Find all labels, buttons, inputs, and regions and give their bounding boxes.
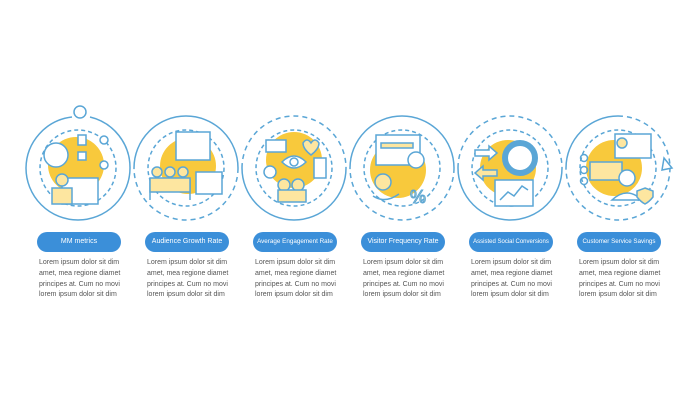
text 4: Lorem ipsum dolor sit dim amet, mea regione diamet principes at. Cum no movi lorem ipsum dolor sit dim xyxy=(363,259,444,298)
step 5 circle xyxy=(458,116,562,220)
pill: Average Engagement Rate xyxy=(253,232,337,252)
pill: Visitor Frequency Rate xyxy=(361,232,445,252)
pill: Assisted Social Conversions xyxy=(469,232,553,252)
pill: Assisted Social Conversions: Assisted Social Conversions xyxy=(473,239,549,245)
text 1: Lorem ipsum dolor sit dim amet, mea regione diamet principes at. Cum no movi lorem ipsum dolor sit dim xyxy=(39,259,120,298)
step 3 circle xyxy=(242,116,346,220)
pill: Audience Growth Rate xyxy=(145,232,229,252)
step 2 circle xyxy=(134,116,238,220)
text 5: Lorem ipsum dolor sit dim amet, mea regione diamet principes at. Cum no movi lorem ipsum dolor sit dim xyxy=(471,259,552,298)
text 2: Lorem ipsum dolor sit dim amet, mea regione diamet principes at. Cum no movi lorem ipsum dolor sit dim xyxy=(147,259,228,298)
step 4 circle: % xyxy=(410,187,426,207)
pill: MM metrics xyxy=(37,232,121,252)
text 3: Lorem ipsum dolor sit dim amet, mea regione diamet principes at. Cum no movi lorem ipsum dolor sit dim xyxy=(255,259,336,298)
pill: MM metrics: MM metrics xyxy=(61,238,97,245)
pill: Customer Service Savings xyxy=(577,232,661,252)
pill: Average Engagement Rate: Average Engagement Rate xyxy=(257,238,333,245)
step 4 circle xyxy=(350,116,454,220)
pill: Audience Growth Rate: Audience Growth Rate xyxy=(152,238,222,245)
pill: Customer Service Savings: Customer Service Savings xyxy=(583,238,655,245)
step 1 circle xyxy=(26,106,130,220)
text 6: Lorem ipsum dolor sit dim amet, mea regione diamet principes at. Cum no movi lorem ipsum dolor sit dim xyxy=(579,259,660,298)
step 6 circle xyxy=(566,116,672,220)
pill: Visitor Frequency Rate: Visitor Frequency Rate xyxy=(367,238,439,245)
